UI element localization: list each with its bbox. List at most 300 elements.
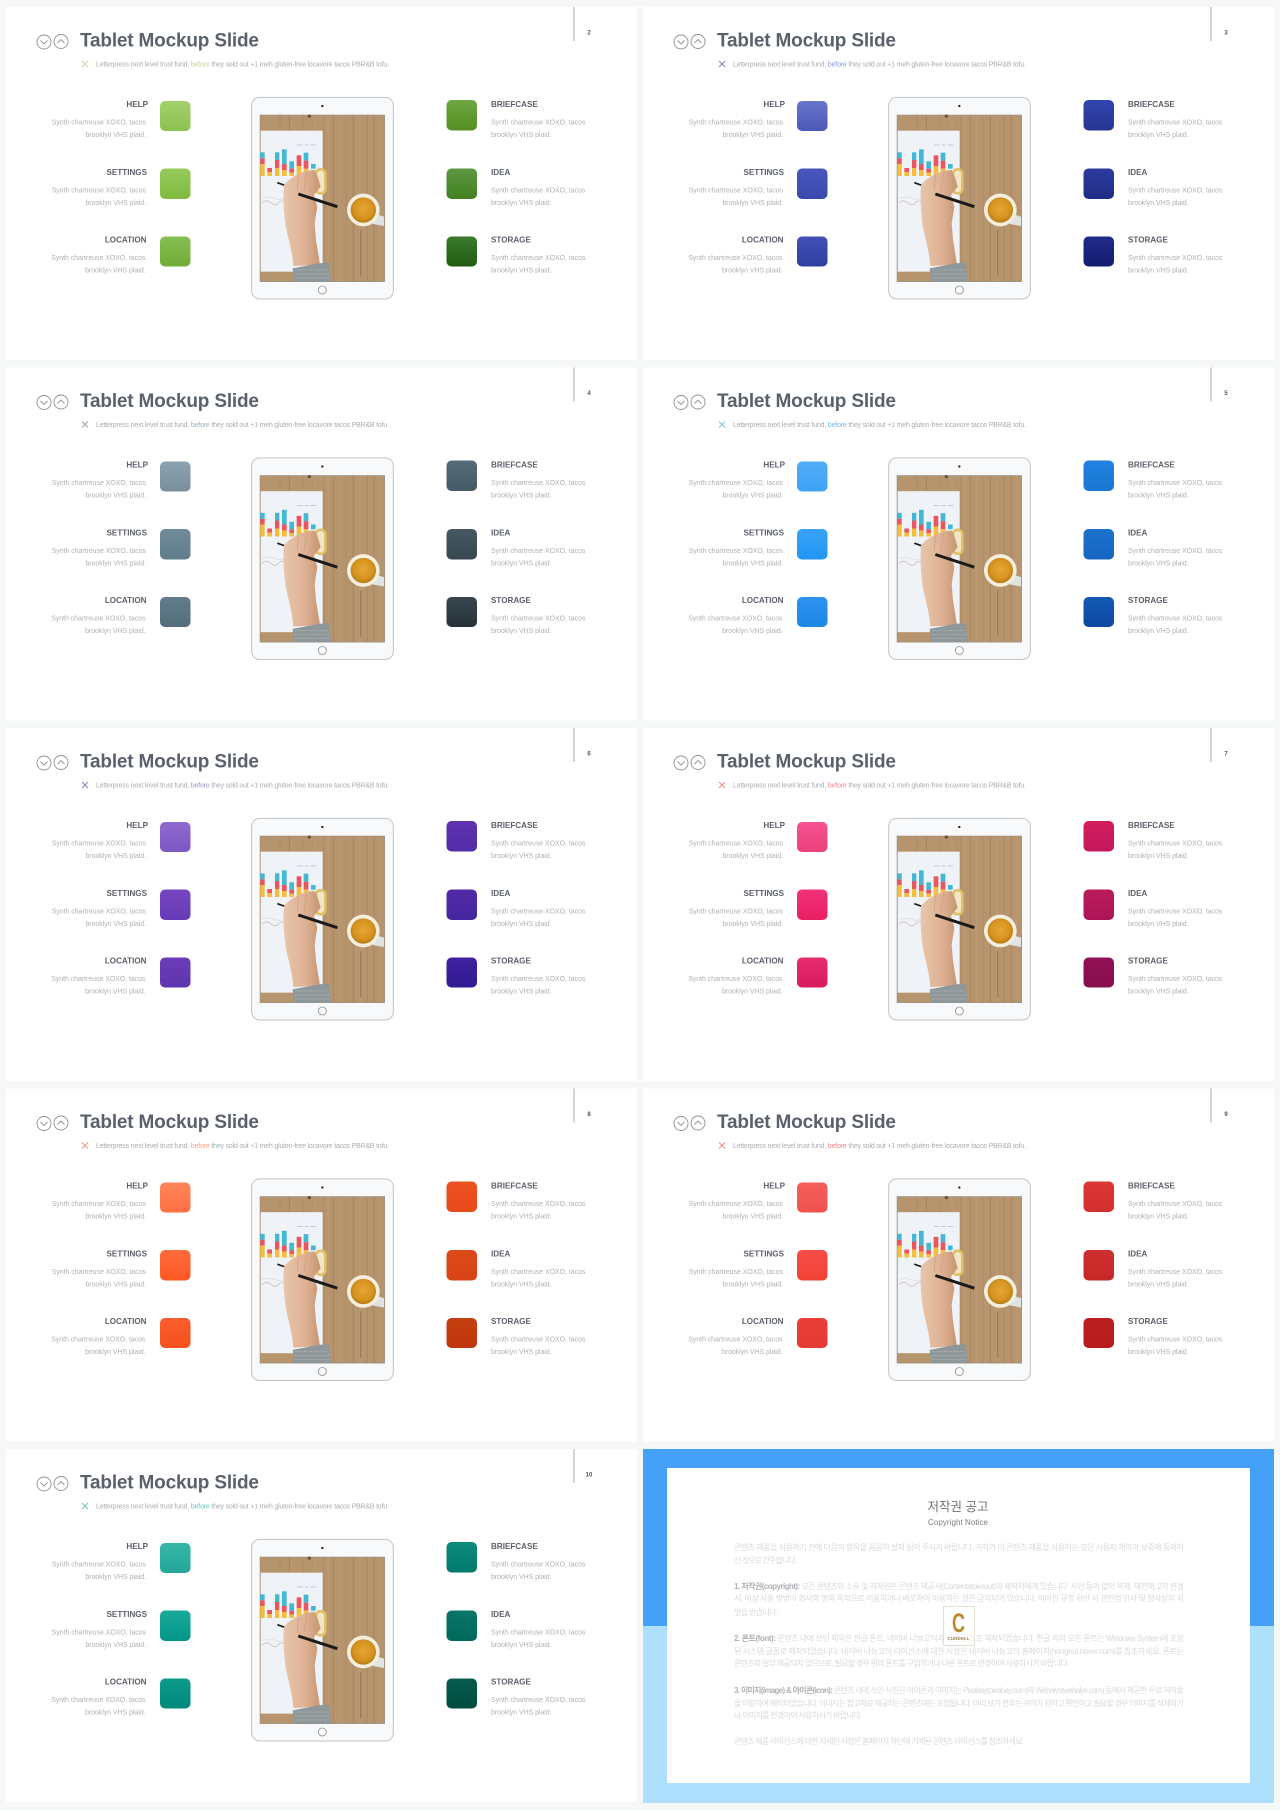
item: help: [52, 1182, 190, 1220]
item: help: Synth chartreuse XOXO, tacos: [52, 1201, 147, 1208]
item: storage: Synth chartreuse XOXO, tacos: [491, 976, 586, 983]
tablet mockup: [889, 818, 1030, 1020]
icon: x mark: [719, 782, 725, 788]
item: idea: [1084, 528, 1223, 568]
item: briefcase: brooklyn VHS plaid.: [1128, 492, 1189, 500]
item: settings: [689, 168, 828, 207]
item: settings: SETTINGS: [744, 168, 785, 177]
item: idea: IDEA: [491, 168, 510, 177]
item: idea: Synth chartreuse XOXO, tacos: [1128, 908, 1223, 916]
logo: gold C badge: C: [952, 1608, 965, 1638]
tablet mockup: [252, 1539, 393, 1741]
page number: 7: [1224, 752, 1228, 758]
item: idea: IDEA: [1128, 168, 1147, 177]
item: briefcase: BRIEFCASE: [491, 1182, 538, 1190]
item: help: Synth chartreuse XOXO, tacos: [52, 840, 147, 848]
item: briefcase: brooklyn VHS plaid.: [491, 1574, 552, 1581]
item: help: [52, 460, 190, 500]
item: help: Synth chartreuse XOXO, tacos: [52, 120, 147, 126]
copyright body text: 3. 이미지(image) & 아이콘(icon): 콘텐츠 내에 쓰인 사진은 아이콘과 이미지는 Pixabay(pixabay.com)와 Webalys(webalys.com) 등에서 제공한 무료 저작물: [734, 1685, 1184, 1695]
item: help: brooklyn VHS plaid.: [85, 853, 146, 860]
item: storage: Synth chartreuse XOXO, tacos: [1128, 616, 1223, 622]
item: location: LOCATION: [105, 596, 147, 605]
panel: slide 8 orange: [6, 1088, 637, 1442]
item: idea: brooklyn VHS plaid.: [491, 1642, 552, 1649]
copyright body text: 시, 비상 사용 방법이 회사의 명의 목적으로 이용하거나 배포하여 이용하는 것은 금지되어 있습니다. 이러한 규정 위반 시 관련법 민사 및 형사상의 처: [734, 1593, 1184, 1603]
page number: 9: [1224, 1112, 1228, 1118]
item: idea: brooklyn VHS plaid.: [1128, 200, 1189, 207]
item: location: Synth chartreuse XOXO, tacos: [688, 616, 783, 622]
item: idea: Synth chartreuse XOXO, tacos: [491, 188, 586, 194]
item: help: brooklyn VHS plaid.: [85, 1214, 146, 1220]
item: briefcase: Synth chartreuse XOXO, tacos: [1128, 1201, 1223, 1208]
item: briefcase: Synth chartreuse XOXO, tacos: [491, 120, 586, 126]
item: idea: [446, 1250, 586, 1288]
subtitle: Letterpress next level trust fund, before they sold out +1 meh gluten-free locavore tacos PBR&B tofu.: [733, 1143, 1026, 1150]
item: help: brooklyn VHS plaid.: [85, 492, 146, 500]
title: Tablet Mockup Slide: [717, 391, 896, 412]
copyright body text: 벌을 받습니다.: [734, 1607, 778, 1617]
item: idea: [446, 1610, 586, 1649]
item: storage: [446, 1678, 586, 1716]
item: idea: Synth chartreuse XOXO, tacos: [491, 1269, 586, 1276]
item: storage: [1084, 596, 1223, 635]
item: idea: [1084, 1250, 1223, 1288]
icon: x mark: [719, 1142, 725, 1148]
item: storage: STORAGE: [491, 596, 531, 605]
title: Tablet Mockup Slide: [80, 752, 259, 772]
title: Tablet Mockup Slide: [80, 30, 259, 52]
item: storage: STORAGE: [491, 956, 531, 966]
copyright body text: 2. 폰트(font): 콘텐츠 내에 쓰인 제목은 한글 폰트, 네이버 나눔고딕과 영문 폰트로 제작되었습니다. 한글 외의 모든 폰트는 Windows System에 포함: [734, 1633, 1185, 1643]
item: briefcase: Synth chartreuse XOXO, tacos: [491, 480, 586, 487]
item: settings: SETTINGS: [107, 1250, 148, 1258]
item: idea: IDEA: [491, 1610, 510, 1619]
icon: x mark: [82, 1503, 88, 1509]
item: idea: brooklyn VHS plaid.: [1128, 1282, 1189, 1288]
item: settings: Synth chartreuse XOXO, tacos: [52, 548, 147, 555]
item: settings: [689, 528, 828, 568]
item: help: Synth chartreuse XOXO, tacos: [52, 1562, 147, 1568]
item: help: HELP: [763, 460, 786, 470]
icon: chevron circles: [37, 1116, 68, 1130]
item: idea: [1084, 889, 1223, 928]
copyright body text: 나 이미지를 변경하여 사용하시기 바랍니다.: [734, 1710, 862, 1720]
item: storage: [1084, 956, 1223, 996]
page number: [574, 1088, 591, 1122]
item: help: brooklyn VHS plaid.: [722, 132, 783, 139]
title: Tablet Mockup Slide: [80, 1472, 259, 1494]
item: idea: brooklyn VHS plaid.: [1128, 560, 1189, 568]
item: briefcase: BRIEFCASE: [491, 821, 538, 830]
copyright body text: 콘텐츠 제품 라이선스에 대한 자세한 사항은 홈페이지 하단에 기재된 콘텐츠 라이선스를 참조하세요.: [734, 1736, 1024, 1746]
subtitle: Letterpress next level trust fund, before they sold out +1 meh gluten-free locavore tacos PBR&B tofu.: [733, 422, 1026, 429]
item: settings: SETTINGS: [107, 1610, 148, 1619]
item: storage: brooklyn VHS plaid.: [1128, 628, 1189, 635]
item: location: brooklyn VHS plaid.: [722, 628, 783, 635]
tablet mockup: [252, 1179, 393, 1380]
item: help: [689, 821, 828, 860]
copyright body text: 된 시스템 글꼴로 제작되었습니다. 네이버 나눔고딕 라이선스에 대한 사항은 네이버 나눔고딕 홈페이지(hangeul.naver.com)를 참조하세요. 폰트는: [734, 1646, 1184, 1656]
page number: [1211, 1088, 1228, 1122]
item: settings: SETTINGS: [744, 889, 785, 898]
item: storage: brooklyn VHS plaid.: [1128, 988, 1189, 996]
panel: slide 6 purple: [6, 728, 637, 1081]
item: briefcase: brooklyn VHS plaid.: [491, 492, 552, 500]
item: settings: brooklyn VHS plaid.: [85, 921, 146, 928]
item: briefcase: brooklyn VHS plaid.: [1128, 853, 1189, 860]
item: briefcase: [446, 1542, 586, 1581]
item: storage: Synth chartreuse XOXO, tacos: [1128, 1336, 1223, 1344]
item: idea: IDEA: [491, 528, 510, 538]
item: settings: [52, 168, 190, 207]
item: storage: STORAGE: [1128, 596, 1168, 605]
item: help: Synth chartreuse XOXO, tacos: [689, 480, 784, 487]
item: settings: [52, 1610, 190, 1649]
item: briefcase: [1084, 100, 1223, 139]
item: location: Synth chartreuse XOXO, tacos: [688, 1336, 783, 1344]
tablet mockup: [889, 97, 1030, 299]
item: help: Synth chartreuse XOXO, tacos: [689, 1201, 784, 1208]
icon: chevron circles: [37, 756, 68, 770]
item: idea: Synth chartreuse XOXO, tacos: [1128, 548, 1223, 555]
page number: 5: [1224, 391, 1228, 397]
subtitle: Letterpress next level trust fund, before they sold out +1 meh gluten-free locavore tacos PBR&B tofu.: [96, 782, 389, 790]
title: Tablet Mockup Slide: [717, 752, 896, 772]
item: location: LOCATION: [105, 1317, 147, 1326]
item: location: [688, 596, 828, 635]
item: help: HELP: [763, 100, 786, 109]
item: location: [688, 1317, 828, 1356]
copyright heading: 저작권 공고: [928, 1500, 988, 1514]
item: settings: SETTINGS: [107, 168, 148, 177]
item: location: [688, 236, 828, 274]
copyright subheading: Copyright Notice: [928, 1518, 989, 1527]
page number: [1211, 368, 1228, 402]
item: help: brooklyn VHS plaid.: [85, 132, 146, 139]
item: storage: [1084, 236, 1223, 274]
item: briefcase: brooklyn VHS plaid.: [491, 853, 552, 860]
item: idea: brooklyn VHS plaid.: [491, 560, 552, 568]
item: briefcase: BRIEFCASE: [1128, 460, 1175, 470]
page number: 8: [587, 1112, 591, 1118]
item: location: LOCATION: [742, 236, 784, 244]
item: idea: Synth chartreuse XOXO, tacos: [1128, 188, 1223, 194]
item: settings: [52, 1250, 190, 1288]
copyright body text: 을 이용하여 제작되었습니다. 이미지는 참고자료 제공되는 콘텐츠에는 포함됩니다. 미리 보기 전후는 귀하가 원하고 확인하고 필요할 경우 이미지를 삭제하거: [734, 1698, 1184, 1708]
subtitle: Letterpress next level trust fund, before they sold out +1 meh gluten-free locavore tacos PBR&B tofu.: [733, 62, 1026, 68]
item: help: HELP: [126, 1542, 149, 1551]
panel: slide 3 indigo: [643, 7, 1274, 360]
item: briefcase: Synth chartreuse XOXO, tacos: [491, 840, 586, 848]
item: location: [51, 596, 190, 635]
item: storage: brooklyn VHS plaid.: [1128, 1349, 1189, 1356]
item: settings: brooklyn VHS plaid.: [722, 921, 783, 928]
item: briefcase: BRIEFCASE: [491, 100, 538, 109]
page number: [574, 1449, 593, 1483]
item: storage: brooklyn VHS plaid.: [491, 1349, 552, 1356]
item: idea: IDEA: [1128, 889, 1147, 898]
item: storage: [446, 1317, 586, 1356]
item: settings: SETTINGS: [744, 528, 785, 538]
subtitle: Letterpress next level trust fund, before they sold out +1 meh gluten-free locavore tacos PBR&B tofu.: [96, 1143, 389, 1150]
item: help: brooklyn VHS plaid.: [85, 1574, 146, 1581]
item: settings: [689, 1250, 828, 1288]
icon: x mark: [82, 61, 88, 67]
item: location: brooklyn VHS plaid.: [722, 988, 783, 996]
item: briefcase: brooklyn VHS plaid.: [1128, 132, 1189, 139]
item: settings: brooklyn VHS plaid.: [85, 1282, 146, 1288]
icon: chevron circles: [674, 395, 705, 410]
tablet mockup: [252, 818, 393, 1020]
icon: x mark: [82, 782, 88, 788]
icon: chevron circles: [674, 1116, 705, 1130]
item: storage: STORAGE: [491, 236, 531, 244]
item: briefcase: brooklyn VHS plaid.: [491, 1214, 552, 1220]
icon: chevron circles: [674, 756, 705, 770]
item: help: brooklyn VHS plaid.: [722, 1214, 783, 1220]
item: location: Synth chartreuse XOXO, tacos: [51, 1697, 146, 1704]
item: help: HELP: [126, 100, 149, 109]
item: settings: Synth chartreuse XOXO, tacos: [689, 908, 784, 916]
item: briefcase: BRIEFCASE: [1128, 1182, 1175, 1190]
item: settings: Synth chartreuse XOXO, tacos: [689, 548, 784, 555]
item: idea: IDEA: [491, 889, 510, 898]
title: Tablet Mockup Slide: [717, 1112, 896, 1133]
item: idea: [1084, 168, 1223, 207]
item: help: HELP: [126, 1182, 149, 1190]
icon: chevron circles: [37, 395, 68, 410]
item: location: Synth chartreuse XOXO, tacos: [688, 976, 783, 983]
item: settings: [689, 889, 828, 928]
item: help: brooklyn VHS plaid.: [722, 853, 783, 860]
item: settings: Synth chartreuse XOXO, tacos: [52, 908, 147, 916]
item: settings: SETTINGS: [107, 528, 148, 538]
title: Tablet Mockup Slide: [717, 30, 896, 52]
panel: slide 2 green: [6, 7, 637, 360]
item: location: [51, 1678, 190, 1716]
item: location: Synth chartreuse XOXO, tacos: [51, 255, 146, 262]
icon: chevron circles: [37, 34, 68, 49]
subtitle: Letterpress next level trust fund, before they sold out +1 meh gluten-free locavore tacos PBR&B tofu.: [96, 422, 389, 429]
item: storage: [446, 236, 586, 274]
item: storage: Synth chartreuse XOXO, tacos: [491, 616, 586, 622]
item: briefcase: Synth chartreuse XOXO, tacos: [1128, 120, 1223, 126]
item: settings: Synth chartreuse XOXO, tacos: [52, 1630, 147, 1636]
item: idea: [446, 168, 586, 207]
item: storage: STORAGE: [1128, 236, 1168, 244]
page number: [574, 728, 591, 762]
item: location: LOCATION: [742, 956, 784, 966]
copyright body text: 1. 저작권(copyright): 모든 콘텐츠의 소유 및 저작권은 콘텐츠 제공사(Contentstokeout)와 제작자에게 있습니다. 사전 동의 없이 복제, 재판매, 2차 변경: [734, 1581, 1184, 1591]
item: help: [52, 821, 190, 860]
page number: 10: [586, 1472, 593, 1478]
item: briefcase: [1084, 1182, 1223, 1220]
item: location: [51, 956, 190, 996]
item: briefcase: brooklyn VHS plaid.: [491, 132, 552, 139]
subtitle: Letterpress next level trust fund, before they sold out +1 meh gluten-free locavore tacos PBR&B tofu.: [96, 1504, 389, 1510]
item: idea: Synth chartreuse XOXO, tacos: [491, 548, 586, 555]
page number: [574, 368, 591, 402]
icon: x mark: [82, 422, 88, 428]
item: location: brooklyn VHS plaid.: [722, 268, 783, 274]
item: help: HELP: [763, 821, 786, 830]
item: location: brooklyn VHS plaid.: [85, 1349, 146, 1356]
item: help: [689, 100, 828, 139]
panel: slide 5 blue: [643, 368, 1274, 720]
icon: chevron circles: [37, 1476, 68, 1491]
item: briefcase: BRIEFCASE: [491, 460, 538, 470]
item: settings: [52, 528, 190, 568]
title: Tablet Mockup Slide: [80, 391, 259, 412]
panel: slide 4 blue grey: [6, 368, 637, 720]
item: settings: Synth chartreuse XOXO, tacos: [52, 188, 147, 194]
icon: x mark: [719, 61, 725, 67]
item: location: brooklyn VHS plaid.: [85, 1710, 146, 1716]
item: settings: brooklyn VHS plaid.: [85, 1642, 146, 1649]
item: briefcase: Synth chartreuse XOXO, tacos: [1128, 480, 1223, 487]
item: storage: brooklyn VHS plaid.: [491, 988, 552, 996]
item: settings: SETTINGS: [744, 1250, 785, 1258]
item: help: HELP: [763, 1182, 786, 1190]
page number: [1211, 7, 1228, 41]
item: storage: brooklyn VHS plaid.: [491, 268, 552, 274]
item: settings: brooklyn VHS plaid.: [85, 200, 146, 207]
item: briefcase: Synth chartreuse XOXO, tacos: [491, 1201, 586, 1208]
item: settings: Synth chartreuse XOXO, tacos: [52, 1269, 147, 1276]
item: idea: brooklyn VHS plaid.: [1128, 921, 1189, 928]
item: idea: Synth chartreuse XOXO, tacos: [491, 908, 586, 916]
item: settings: [52, 889, 190, 928]
title: Tablet Mockup Slide: [80, 1112, 259, 1133]
item: location: Synth chartreuse XOXO, tacos: [51, 616, 146, 622]
item: briefcase: [446, 100, 586, 139]
item: settings: SETTINGS: [107, 889, 148, 898]
item: briefcase: [446, 460, 586, 500]
item: location: brooklyn VHS plaid.: [85, 628, 146, 635]
icon: chevron circles: [674, 34, 705, 49]
tablet mockup: [889, 458, 1030, 659]
page number: 4: [587, 391, 591, 397]
item: help: [52, 1542, 190, 1581]
page number: 6: [587, 752, 591, 758]
tablet mockup: [252, 97, 393, 299]
item: briefcase: BRIEFCASE: [491, 1542, 538, 1551]
page number: [574, 7, 591, 41]
item: help: [689, 1182, 828, 1220]
item: settings: brooklyn VHS plaid.: [85, 560, 146, 568]
tablet mockup: [252, 458, 393, 659]
item: idea: [446, 528, 586, 568]
item: idea: IDEA: [1128, 528, 1147, 538]
item: briefcase: BRIEFCASE: [1128, 821, 1175, 830]
item: settings: brooklyn VHS plaid.: [722, 200, 783, 207]
item: storage: Synth chartreuse XOXO, tacos: [491, 255, 586, 262]
panel: copyright notice: [643, 1449, 1274, 1803]
item: location: LOCATION: [105, 956, 147, 966]
item: idea: brooklyn VHS plaid.: [491, 921, 552, 928]
item: storage: [1084, 1317, 1223, 1356]
logo: gold C badge: CUNDELL: [948, 1636, 970, 1641]
item: briefcase: [446, 821, 586, 860]
item: location: [51, 236, 190, 274]
item: storage: brooklyn VHS plaid.: [491, 628, 552, 635]
item: storage: STORAGE: [491, 1317, 531, 1326]
item: location: brooklyn VHS plaid.: [85, 988, 146, 996]
tablet mockup: [889, 1179, 1030, 1380]
item: storage: Synth chartreuse XOXO, tacos: [491, 1697, 586, 1704]
copyright body text: [734, 1542, 1185, 1746]
item: location: LOCATION: [105, 236, 147, 244]
page number: 2: [587, 30, 591, 36]
page number: [1211, 728, 1228, 762]
item: idea: Synth chartreuse XOXO, tacos: [491, 1630, 586, 1636]
panel: slide 10 teal: [6, 1449, 637, 1802]
item: briefcase: [1084, 460, 1223, 500]
item: help: [689, 460, 828, 500]
icon: x mark: [82, 1142, 88, 1148]
item: location: [688, 956, 828, 996]
item: storage: Synth chartreuse XOXO, tacos: [1128, 976, 1223, 983]
item: briefcase: Synth chartreuse XOXO, tacos: [1128, 840, 1223, 848]
item: storage: STORAGE: [491, 1678, 531, 1686]
item: help: Synth chartreuse XOXO, tacos: [52, 480, 147, 487]
copyright body text: 콘텐츠 제품을 사용하기 전에 다음의 항목을 꼼꼼히 살펴 읽어 주시기 바랍니다. 귀하가 이 콘텐츠 제품을 사용하는 것은 사용자 계약과 보증에 동의하: [734, 1542, 1185, 1552]
panel: slide 7 pink: [643, 728, 1274, 1081]
item: idea: brooklyn VHS plaid.: [491, 1282, 552, 1288]
item: help: brooklyn VHS plaid.: [722, 492, 783, 500]
item: location: Synth chartreuse XOXO, tacos: [51, 1336, 146, 1344]
item: help: Synth chartreuse XOXO, tacos: [689, 120, 784, 126]
item: briefcase: Synth chartreuse XOXO, tacos: [491, 1562, 586, 1568]
item: location: [51, 1317, 190, 1356]
item: storage: Synth chartreuse XOXO, tacos: [1128, 255, 1223, 262]
subtitle: Letterpress next level trust fund, before they sold out +1 meh gluten-free locavore tacos PBR&B tofu.: [733, 782, 1026, 790]
item: idea: [446, 889, 586, 928]
item: settings: brooklyn VHS plaid.: [722, 560, 783, 568]
item: briefcase: brooklyn VHS plaid.: [1128, 1214, 1189, 1220]
item: storage: STORAGE: [1128, 956, 1168, 966]
item: location: LOCATION: [742, 1317, 784, 1326]
copyright body text: 콘텐츠의 일부 제공되지 않으므로, 필요할 경우 위의 폰트를 구입하거나 다른 폰트로 변경하여 사용하시기 바랍니다.: [734, 1658, 1069, 1668]
item: idea: IDEA: [1128, 1250, 1147, 1258]
item: storage: [446, 956, 586, 996]
item: idea: Synth chartreuse XOXO, tacos: [1128, 1269, 1223, 1276]
item: storage: brooklyn VHS plaid.: [491, 1710, 552, 1716]
subtitle: Letterpress next level trust fund, before they sold out +1 meh gluten-free locavore tacos PBR&B tofu.: [96, 62, 389, 68]
logo: gold C badge: [944, 1606, 974, 1646]
item: location: brooklyn VHS plaid.: [85, 268, 146, 274]
item: briefcase: [1084, 821, 1223, 860]
item: idea: brooklyn VHS plaid.: [491, 200, 552, 207]
page number: 3: [1224, 30, 1228, 36]
item: settings: Synth chartreuse XOXO, tacos: [689, 1269, 784, 1276]
item: help: Synth chartreuse XOXO, tacos: [689, 840, 784, 848]
item: idea: IDEA: [491, 1250, 510, 1258]
item: briefcase: BRIEFCASE: [1128, 100, 1175, 109]
item: help: HELP: [126, 460, 149, 470]
item: settings: Synth chartreuse XOXO, tacos: [689, 188, 784, 194]
item: location: LOCATION: [742, 596, 784, 605]
copyright body text: 신 것으로 간주합니다.: [734, 1555, 797, 1565]
icon: x mark: [719, 422, 725, 428]
item: settings: brooklyn VHS plaid.: [722, 1282, 783, 1288]
item: location: Synth chartreuse XOXO, tacos: [688, 255, 783, 262]
item: help: HELP: [126, 821, 149, 830]
item: location: LOCATION: [105, 1678, 147, 1686]
item: help: [52, 100, 190, 139]
item: storage: [446, 596, 586, 635]
